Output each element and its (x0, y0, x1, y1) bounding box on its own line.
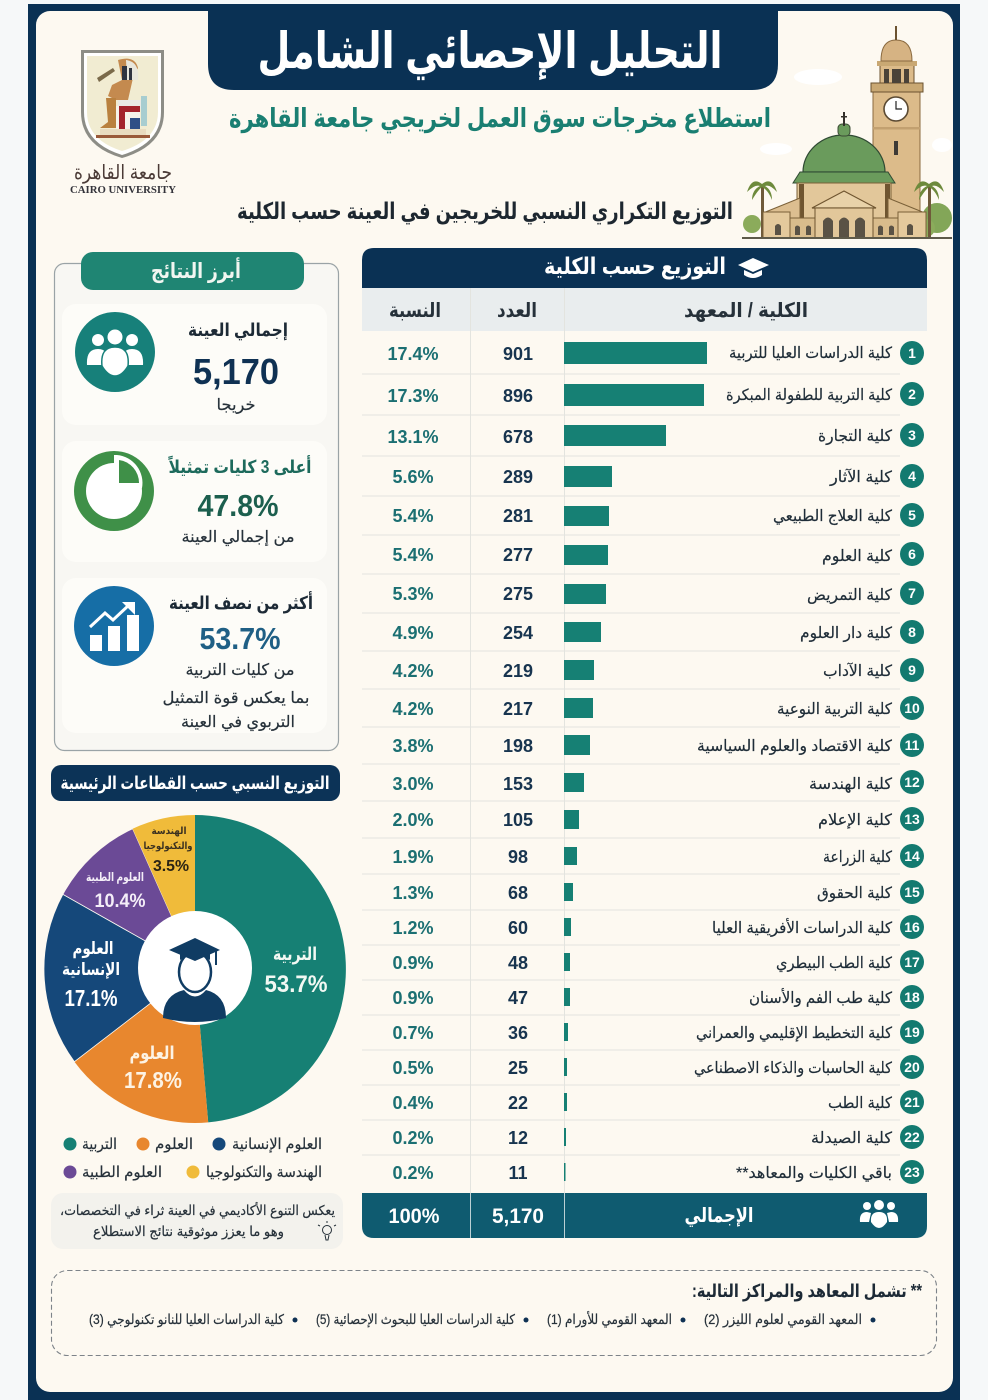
card: top three faculties (62, 441, 327, 562)
row 20: كلية الحاسبات والذكاء الاصطناعي (694, 1060, 893, 1078)
row 14: كلية الزراعة (823, 849, 893, 866)
card: total sample: إجمالي العينة (188, 320, 288, 341)
slice: humanities (44, 894, 195, 1062)
logo: Cairo University (70, 50, 177, 196)
title banner (208, 11, 778, 90)
panel: key results (54, 252, 338, 750)
row 6: 5.4% (392, 545, 434, 565)
row 20: 20 (904, 1059, 920, 1075)
slice: sciences (74, 969, 208, 1123)
row 8: 254 (503, 623, 533, 643)
row 13 (392, 807, 924, 831)
slice: medical sciences: العلوم الطبية (86, 870, 144, 885)
row 15: 1.3% (392, 883, 434, 903)
logo English wordmark: CAIRO UNIVERSITY (70, 185, 177, 196)
legend: الهندسة والتكنولوجيا (206, 1164, 322, 1181)
table column headers: الكلية / المعهد (684, 300, 808, 322)
row 7: 5.3% (392, 584, 434, 604)
row 14: 1.9% (392, 847, 434, 867)
panel: footnote institutes: ** تشمل المعاهد والمراكز التالية: (692, 1281, 922, 1302)
card: total sample (62, 304, 327, 425)
row 17: 48 (508, 953, 528, 973)
row 19: 19 (904, 1024, 920, 1040)
row 13: 13 (904, 811, 920, 827)
row 14: 98 (508, 847, 528, 867)
row 9: كلية الآداب (823, 662, 893, 680)
row 1: كلية الدراسات العليا للتربية (729, 345, 893, 362)
row 18: كلية طب الفم والأسنان (749, 988, 893, 1008)
row 11: 3.8% (392, 736, 434, 756)
row 19: كلية التخطيط الإقليمي والعمراني (696, 1025, 893, 1043)
main hall (742, 183, 952, 239)
row 18: 0.9% (392, 988, 434, 1008)
card: more than half: أكثر من نصف العينة (169, 591, 313, 614)
row 6 (392, 542, 924, 566)
row 22: 12 (508, 1128, 528, 1148)
key results heading pill (81, 252, 304, 290)
row 11: 11 (905, 737, 920, 753)
card: more than half: التربوي في العينة (181, 714, 295, 732)
card: more than half: 53.7% (200, 621, 280, 656)
row 3: كلية التجارة (818, 428, 893, 445)
row 22 (392, 1125, 924, 1149)
title banner: التحليل الإحصائي الشامل (258, 23, 722, 80)
slice: engineering and technology: الهندسة (152, 826, 186, 837)
table total row: الإجمالي (684, 1205, 754, 1228)
row 16: 60 (508, 918, 528, 938)
row 10: 4.2% (392, 699, 434, 719)
row 10 (392, 696, 924, 720)
row 6: 6 (908, 546, 916, 562)
row 8 (392, 620, 924, 644)
slice: humanities: 17.1% (64, 985, 118, 1011)
row 4: 5.6% (392, 467, 434, 487)
slice: education (195, 815, 346, 1122)
row 22: 0.2% (392, 1128, 434, 1148)
row 1: 901 (503, 344, 533, 364)
row 19: 0.7% (392, 1023, 434, 1043)
row 1 (387, 341, 924, 365)
panel: distribution table (362, 248, 927, 1238)
row 12: كلية الهندسة (809, 776, 893, 794)
icon: graduation cap (738, 258, 769, 278)
legend: العلوم الإنسانية (232, 1136, 322, 1153)
legend: العلوم الطبية (82, 1164, 162, 1181)
row 16: 1.2% (392, 918, 434, 938)
row 5: 5 (908, 507, 916, 523)
card: total sample: 5,170 (193, 351, 279, 392)
row 18: 47 (508, 988, 528, 1008)
note: diversity: يعكس التنوع الأكاديمي في العينة ثراء في التخصصات، (60, 1202, 335, 1219)
row 3: 13.1% (387, 427, 439, 447)
footnote list: المعهد القومي لعلوم الليزر (2) (704, 1312, 862, 1328)
row 12: 153 (503, 774, 533, 794)
row 1: 17.4% (387, 344, 439, 364)
row 10: كلية التربية النوعية (777, 701, 893, 718)
row 8: كلية دار العلوم (800, 625, 893, 642)
legend: التربية (82, 1136, 117, 1153)
row 8: 8 (908, 624, 916, 640)
row 20: 0.5% (392, 1058, 434, 1078)
tower (871, 26, 923, 215)
slice: sciences: 17.8% (124, 1067, 182, 1093)
row 20 (392, 1055, 924, 1079)
row 23: باقي الكليات والمعاهد** (736, 1165, 892, 1183)
row 3: 3 (908, 427, 916, 443)
slice: education: التربية (273, 944, 317, 965)
row 11: كلية الاقتصاد والعلوم السياسية (697, 738, 893, 756)
slice: medical sciences (63, 829, 195, 969)
row 17: كلية الطب البيطري (776, 955, 893, 973)
key results heading pill: أبرز النتائج (151, 256, 241, 283)
row 2: كلية التربية للطفولة المبكرة (726, 387, 893, 404)
card: top three faculties: من إجمالي العينة (182, 529, 294, 547)
row 5 (392, 503, 924, 527)
row 9: 4.2% (392, 661, 434, 681)
card: more than half (62, 578, 327, 733)
slice: engineering and technology (133, 815, 195, 969)
icon: graduate (138, 911, 252, 1025)
card: top three faculties: أعلى 3 كليات تمثيلاً (167, 455, 312, 477)
slice: education: 53.7% (264, 971, 328, 998)
note: diversity (51, 1193, 343, 1249)
row 9: 219 (503, 661, 533, 681)
row 11 (392, 733, 924, 757)
row 9 (392, 658, 924, 682)
legend: العلوم (155, 1136, 193, 1153)
row 10: 10 (904, 700, 920, 716)
row 23: 11 (508, 1163, 528, 1183)
footnote list: كلية الدراسات العليا للنانو تكنولوجي (3) (89, 1312, 285, 1328)
row 15 (392, 880, 924, 904)
card: total sample: خريجا (216, 397, 256, 415)
row 6: كلية العلوم (822, 548, 893, 565)
footnote list (89, 1311, 876, 1328)
slice: engineering and technology: 3.5% (153, 858, 189, 875)
row 21 (392, 1090, 924, 1114)
slice: humanities: العلوم (72, 939, 114, 959)
section heading: التوزيع التكراري النسبي للخريجين في العينة حسب الكلية (237, 198, 733, 225)
row 7: 275 (503, 584, 533, 604)
card: more than half: من كليات التربية (186, 662, 294, 680)
illustration: university building (742, 26, 952, 239)
row 23: 23 (904, 1164, 920, 1180)
row 23: 0.2% (392, 1163, 434, 1183)
chart: sector pie (44, 815, 346, 1123)
row 15: 15 (904, 884, 920, 900)
slice: humanities: الإنسانية (62, 960, 120, 979)
icon: pie (74, 451, 154, 531)
row 23 (392, 1160, 924, 1184)
table total row: 5,170 (492, 1205, 544, 1228)
row 21: 0.4% (392, 1093, 434, 1113)
table total row: 100% (388, 1205, 440, 1228)
row 21: كلية الطب (828, 1095, 893, 1112)
table column headers: النسبة (389, 300, 441, 322)
row 5: كلية العلاج الطبيعي (773, 508, 893, 526)
row 16 (392, 915, 924, 939)
shield (81, 50, 164, 158)
row 5: 5.4% (392, 506, 434, 526)
row 8: 4.9% (392, 623, 434, 643)
slice: medical sciences: 10.4% (94, 891, 146, 912)
subtitle: استطلاع مخرجات سوق العمل لخريجي جامعة القاهرة (229, 103, 771, 134)
table total row (362, 1193, 927, 1238)
row 12: 12 (904, 774, 920, 790)
footnote list: المعهد القومي للأورام (1) (547, 1311, 672, 1328)
row 16: 16 (904, 919, 920, 935)
icon: people (860, 1200, 898, 1228)
row 2: 896 (503, 386, 533, 406)
row 14 (392, 844, 924, 868)
logo Arabic wordmark: جامعة القاهرة (74, 162, 172, 184)
row 17 (392, 950, 924, 974)
card: more than half: بما يعكس قوة التمثيل (162, 690, 310, 708)
table column headers: العدد (497, 300, 537, 322)
row 2 (387, 382, 924, 406)
icon: light bulb (318, 1221, 336, 1240)
table title: التوزيع حسب الكلية (544, 253, 726, 280)
row 15: كلية الحقوق (817, 885, 893, 902)
row 4: كلية الآثار (829, 468, 893, 486)
panel: footnote institutes (52, 1270, 936, 1356)
row 18 (392, 985, 924, 1009)
panel: sector distribution heading: التوزيع النسبي حسب القطاعات الرئيسية (60, 773, 330, 794)
row 10: 217 (503, 699, 533, 719)
row 9: 9 (908, 662, 916, 678)
panel: sector distribution heading (51, 765, 340, 801)
footnote list: كلية الدراسات العليا للبحوث الإحصائية (5) (316, 1312, 515, 1328)
note: diversity: وهو ما يعزز موثوقية نتائج الاستطلاع (93, 1224, 284, 1240)
card: top three faculties: 47.8% (198, 488, 278, 523)
row 19 (392, 1020, 924, 1044)
row 5: 281 (503, 506, 533, 526)
dome (793, 112, 895, 183)
row 4 (392, 464, 924, 488)
row 22: 22 (904, 1129, 920, 1145)
row 6: 277 (503, 545, 533, 565)
row 17: 0.9% (392, 953, 434, 973)
row 14: 14 (904, 848, 920, 864)
trees and palms (743, 181, 952, 238)
row 21: 21 (904, 1094, 920, 1110)
row 19: 36 (508, 1023, 528, 1043)
row 13: 2.0% (392, 810, 434, 830)
row 3 (387, 423, 924, 447)
row 11: 198 (503, 736, 533, 756)
row 15: 68 (508, 883, 528, 903)
table title (362, 248, 927, 288)
slice: engineering and technology: والتكنولوجيا (144, 841, 192, 852)
row 7: كلية التمريض (807, 587, 893, 604)
icon: growth chart (74, 586, 154, 666)
icon: people (75, 312, 155, 392)
row 16: كلية الدراسات الأفريقية العليا (712, 918, 893, 937)
row 20: 25 (508, 1058, 528, 1078)
row 4: 289 (503, 467, 533, 487)
row 7 (392, 581, 924, 605)
row 13: 105 (503, 810, 533, 830)
row 2: 2 (908, 386, 916, 402)
row 17: 17 (904, 954, 920, 970)
table column headers (362, 288, 927, 331)
row 4: 4 (908, 468, 916, 484)
row 22: كلية الصيدلة (811, 1130, 893, 1147)
row 18: 18 (904, 989, 920, 1005)
row 1: 1 (908, 345, 916, 361)
row 12 (392, 770, 924, 794)
row 2: 17.3% (387, 386, 439, 406)
slice: sciences: العلوم (130, 1043, 174, 1064)
legend (64, 1136, 322, 1181)
row 7: 7 (908, 585, 916, 601)
row 21: 22 (508, 1093, 528, 1113)
row 13: كلية الإعلام (818, 812, 893, 829)
row 3: 678 (503, 427, 533, 447)
row 12: 3.0% (392, 774, 434, 794)
